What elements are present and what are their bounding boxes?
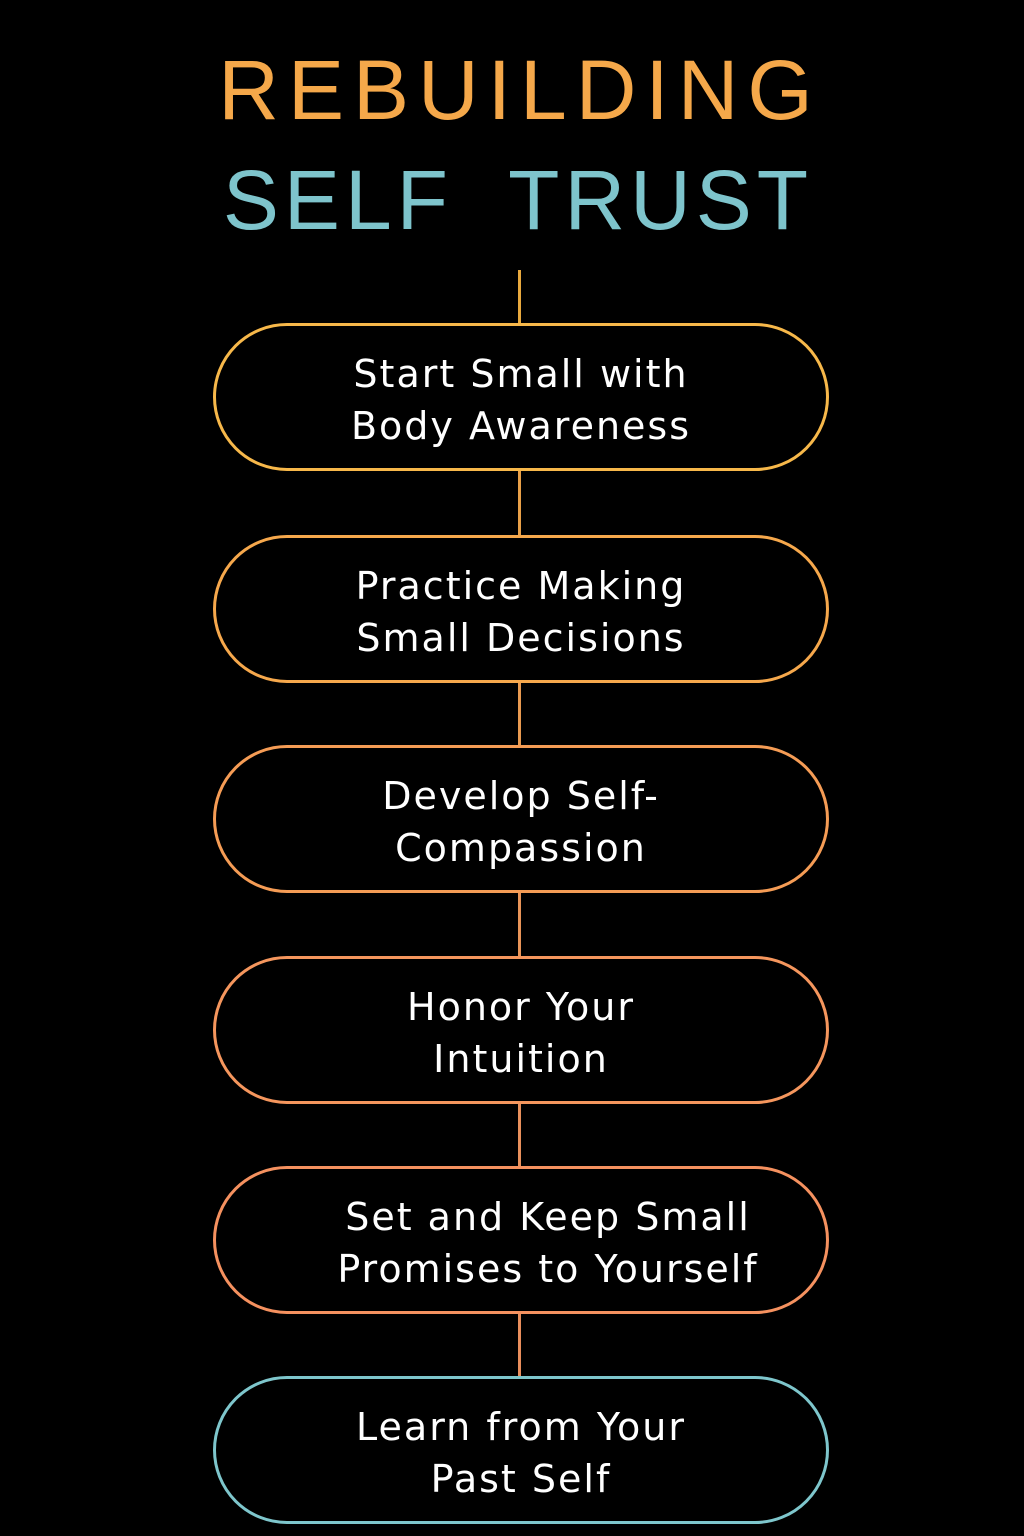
step 2 pill: Small Decisions [356,616,686,660]
connector 1-2 [518,471,521,535]
step 5 pill: Promises to Yourself [337,1247,759,1291]
step 3 pill [213,745,829,893]
step 2 pill: Practice Making [356,564,686,608]
step 5 pill [213,1166,829,1314]
step 6 pill: Learn from Your [356,1405,686,1449]
step 4 pill: Intuition [433,1037,609,1081]
step 6 pill [213,1376,829,1524]
step 3 pill: Compassion [395,826,647,870]
connector 2-3 [518,683,521,745]
step 2 pill [213,535,829,683]
connector 4-5 [518,1104,521,1166]
step 4 pill [213,956,829,1104]
connector: top [518,270,521,323]
step 6 pill: Past Self [431,1457,611,1501]
step 1 pill: Body Awareness [351,404,691,448]
title: rebuilding: REBUILDING [218,43,822,137]
step 3 pill: Develop Self- [382,774,660,818]
step 5 pill: Set and Keep Small [345,1195,751,1239]
title: self trust: SELF TRUST [223,153,813,247]
connector 5-6 [518,1314,521,1376]
step 1 pill: Start Small with [353,352,689,396]
step 1 pill [213,323,829,471]
step 4 pill: Honor Your [407,985,635,1029]
connector 3-4 [518,893,521,956]
